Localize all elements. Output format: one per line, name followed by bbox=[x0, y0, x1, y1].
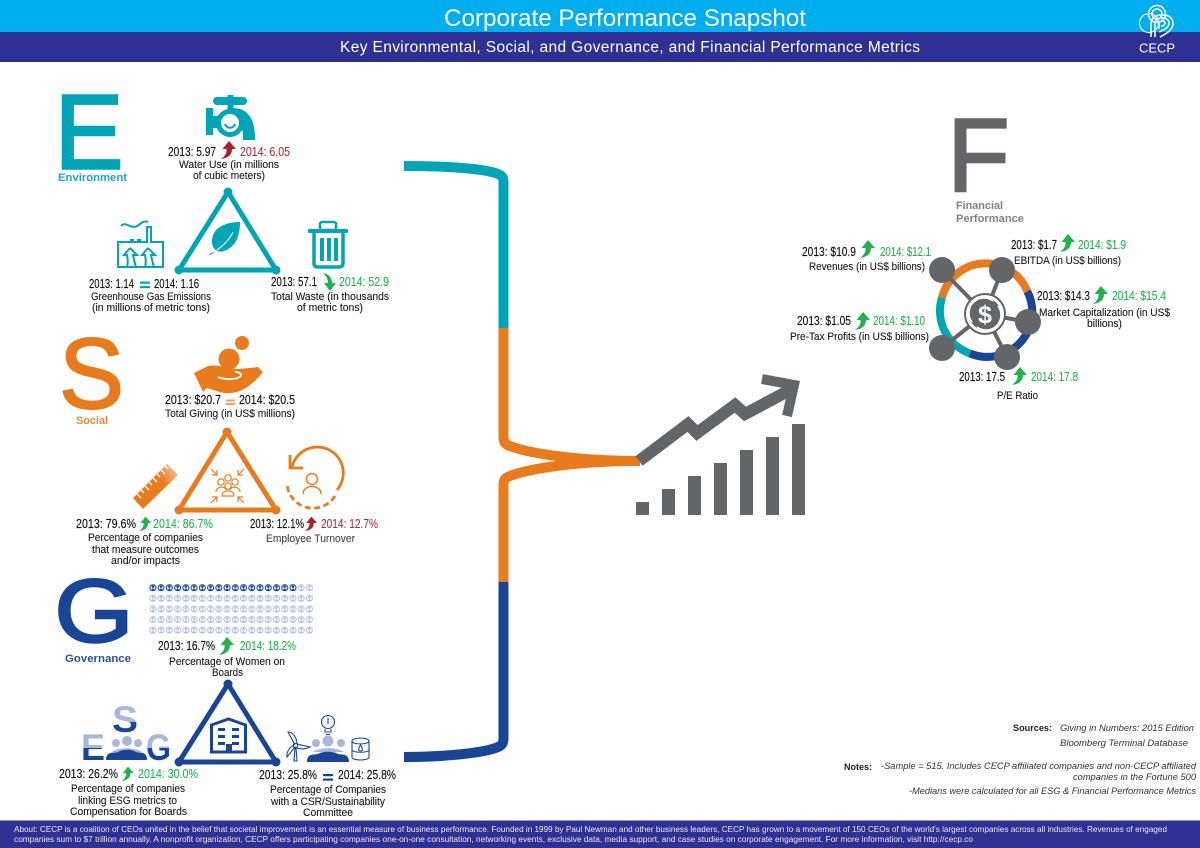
panel: governance bbox=[54, 560, 396, 819]
icon: ESG people bbox=[81, 699, 171, 768]
metric: measure outcomes: that measure outcomes bbox=[92, 544, 200, 556]
metric: greenhouse gas bbox=[89, 277, 212, 314]
metric: market capitalization: Market Capitalization (in US$ bbox=[1039, 307, 1170, 319]
metric: total giving: 2014: $20.5 bbox=[239, 393, 295, 407]
footer: about CECP: About: CECP is a coalition of CEOs united in the belief that societal improvement is an essential measure of business performance. Founded in 1999 by Paul Newman and other business leaders, CECP has grown to a movement of 150 CEOs of the world's largest companies across all industries. Revenues of engaged bbox=[14, 824, 1167, 834]
subtitle: Key Environmental, Social, and Governance, and Financial Performance Metrics bbox=[340, 39, 920, 56]
panel: social bbox=[59, 318, 378, 567]
icon: CSR committee bbox=[287, 716, 369, 762]
metric: greenhouse gas: 2014: 1.16 bbox=[154, 277, 199, 291]
metric: P/E ratio: P/E Ratio bbox=[997, 390, 1038, 402]
panel: financial bbox=[790, 98, 1170, 402]
bracket connector bbox=[404, 166, 640, 757]
metric: pre-tax profits: Pre-Tax Profits (in US$ billions) bbox=[790, 331, 929, 343]
metric: pre-tax profits bbox=[790, 312, 929, 343]
metric: women on boards: Percentage of Women on bbox=[169, 656, 285, 668]
metric: measure outcomes: and/or impacts bbox=[111, 555, 181, 567]
sources and notes: Giving in Numbers: 2015 Edition bbox=[1060, 723, 1194, 734]
metric: EBITDA bbox=[1011, 234, 1126, 267]
metric: employee turnover: 2014: 12.7% bbox=[321, 517, 378, 531]
arrow bbox=[639, 379, 794, 461]
metric: market capitalization: 2014: $15.4 bbox=[1112, 289, 1166, 303]
Governance label: Governance bbox=[65, 653, 131, 665]
metric: total giving: Total Giving (in US$ millions) bbox=[165, 408, 295, 420]
metric: ESG compensation: 2013: 26.2% bbox=[59, 767, 118, 781]
hub diagram: $ bbox=[978, 301, 992, 329]
letter E: E bbox=[54, 74, 124, 192]
sources and notes: -Sample = 515. Includes CECP affiliated companies and non-CECP affiliated bbox=[881, 761, 1197, 772]
metric: ESG compensation: linking ESG metrics to bbox=[78, 795, 177, 807]
metric: total giving bbox=[165, 393, 295, 420]
sources and notes: companies in the Fortune 500 bbox=[1073, 772, 1197, 783]
metric: water use bbox=[168, 141, 290, 182]
metric: EBITDA: 2013: $1.7 bbox=[1011, 238, 1057, 252]
sources and notes: Sources: bbox=[1013, 723, 1052, 734]
metric: ESG compensation bbox=[59, 767, 198, 818]
metric: employee turnover: Employee Turnover bbox=[266, 533, 355, 545]
metric: CSR committee: 2014: 25.8% bbox=[338, 768, 396, 782]
metric: ESG compensation: 2014: 30.0% bbox=[138, 767, 198, 781]
metric: P/E ratio bbox=[959, 367, 1078, 402]
letter F: F bbox=[948, 98, 1010, 214]
Financial Performance label bbox=[956, 200, 1024, 225]
CECP logo: CECP bbox=[1139, 40, 1175, 56]
metric: P/E ratio: 2014: 17.8 bbox=[1031, 370, 1078, 384]
icon: ESG people: E bbox=[81, 727, 105, 768]
metric: pre-tax profits: 2013: $1.05 bbox=[797, 314, 851, 328]
header bbox=[0, 0, 1200, 62]
metric: P/E ratio: 2013: 17.5 bbox=[959, 370, 1005, 384]
metric: ESG compensation: Percentage of companies bbox=[71, 783, 186, 795]
chart: women on boards pictogram bbox=[149, 582, 314, 635]
letter S: S bbox=[59, 318, 124, 430]
icon: giving hand bbox=[194, 336, 263, 393]
metric: EBITDA: 2014: $1.9 bbox=[1078, 238, 1126, 252]
icon: factory bbox=[118, 222, 163, 267]
metric: measure outcomes: Percentage of companies bbox=[88, 532, 204, 544]
metric: ESG compensation: Compensation for Boards bbox=[70, 806, 188, 818]
panel: environment bbox=[54, 74, 390, 314]
metric: CSR committee: 2013: 25.8% bbox=[259, 768, 317, 782]
letter G: G bbox=[54, 560, 134, 660]
metric: water use: 2013: 5.97 bbox=[168, 145, 216, 159]
Environment label: Environment bbox=[58, 172, 127, 184]
metric: revenues: 2013: $10.9 bbox=[802, 245, 856, 259]
triangle with building bbox=[174, 680, 280, 766]
metric: total waste: 2014: 52.9 bbox=[339, 275, 389, 289]
metric: total giving: 2013: $20.7 bbox=[165, 393, 221, 407]
icon: trash can bbox=[308, 222, 348, 267]
metric: CSR committee: with a CSR/Sustainability bbox=[270, 796, 386, 808]
metric: pre-tax profits: 2014: $1.10 bbox=[873, 314, 925, 328]
metric: EBITDA: EBITDA (in US$ billions) bbox=[1014, 255, 1121, 267]
footer: about CECP: companies sum to $7 trillion annually. A nonprofit organization, CECP offers participating companies one-on-one consultation, networking events, exclusive data, media support, and case studies on corporate engagement. For more information, visit http://cecp.co bbox=[14, 834, 973, 844]
metric: total waste bbox=[271, 273, 390, 314]
metric: market capitalization: billions) bbox=[1087, 318, 1122, 330]
sources and notes: Bloomberg Terminal Database bbox=[1060, 738, 1188, 749]
metric: measure outcomes: 2014: 86.7% bbox=[153, 517, 213, 531]
icon: ESG people: G bbox=[146, 727, 171, 768]
metric: employee turnover: 2013: 12.1% bbox=[250, 517, 304, 531]
chart: rising bars with arrow bbox=[636, 379, 805, 515]
metric: water use: Water Use (in millions bbox=[179, 159, 280, 171]
metric: total waste: 2013: 57.1 bbox=[271, 275, 317, 289]
metric: greenhouse gas: Greenhouse Gas Emissions bbox=[91, 291, 212, 303]
footer: about CECP bbox=[0, 820, 1200, 848]
metric: revenues: Revenues (in US$ billions) bbox=[809, 261, 925, 273]
sources and notes: -Medians were calculated for all ESG & Financial Performance Metrics bbox=[909, 786, 1196, 797]
metric: women on boards: Boards bbox=[212, 667, 244, 679]
Financial Performance label: Performance bbox=[956, 213, 1024, 225]
metric: women on boards bbox=[158, 637, 296, 679]
metric: water use: 2014: 6.05 bbox=[240, 145, 290, 159]
metric: greenhouse gas: 2013: 1.14 bbox=[89, 277, 134, 291]
metric: greenhouse gas: (in millions of metric tons) bbox=[92, 302, 210, 314]
icon: ruler bbox=[133, 464, 178, 509]
metric: women on boards: 2013: 16.7% bbox=[158, 639, 215, 653]
metric: CSR committee bbox=[259, 768, 396, 819]
metric: women on boards: 2014: 18.2% bbox=[240, 639, 296, 653]
Financial Performance label: Financial bbox=[956, 200, 1003, 212]
metric: water use: of cubic meters) bbox=[193, 170, 265, 182]
icon: employee turnover bbox=[287, 447, 343, 508]
metric: total waste: of metric tons) bbox=[297, 302, 363, 314]
triangle with people bbox=[174, 428, 280, 514]
sources and notes: Notes: bbox=[844, 762, 872, 773]
metric: revenues: 2014: $12.1 bbox=[880, 245, 931, 259]
Social label: Social bbox=[76, 415, 108, 427]
icon: water tap bbox=[206, 95, 255, 140]
CECP logo bbox=[1139, 6, 1175, 56]
metric: CSR committee: Percentage of Companies bbox=[270, 784, 387, 796]
metric: total waste: Total Waste (in thousands bbox=[271, 291, 390, 303]
metric: CSR committee: Committee bbox=[303, 807, 353, 819]
metric: measure outcomes bbox=[76, 517, 213, 567]
metric: revenues bbox=[802, 240, 931, 273]
metric: market capitalization: 2013: $14.3 bbox=[1037, 289, 1090, 303]
title: Corporate Performance Snapshot bbox=[444, 5, 806, 32]
hub diagram bbox=[929, 257, 1041, 370]
icon: ESG people: S bbox=[112, 699, 138, 740]
triangle with leaf bbox=[174, 188, 280, 274]
metric: measure outcomes: 2013: 79.6% bbox=[76, 517, 136, 531]
metric: market capitalization bbox=[1037, 286, 1170, 330]
metric: employee turnover bbox=[250, 517, 378, 545]
sources and notes bbox=[844, 723, 1197, 797]
